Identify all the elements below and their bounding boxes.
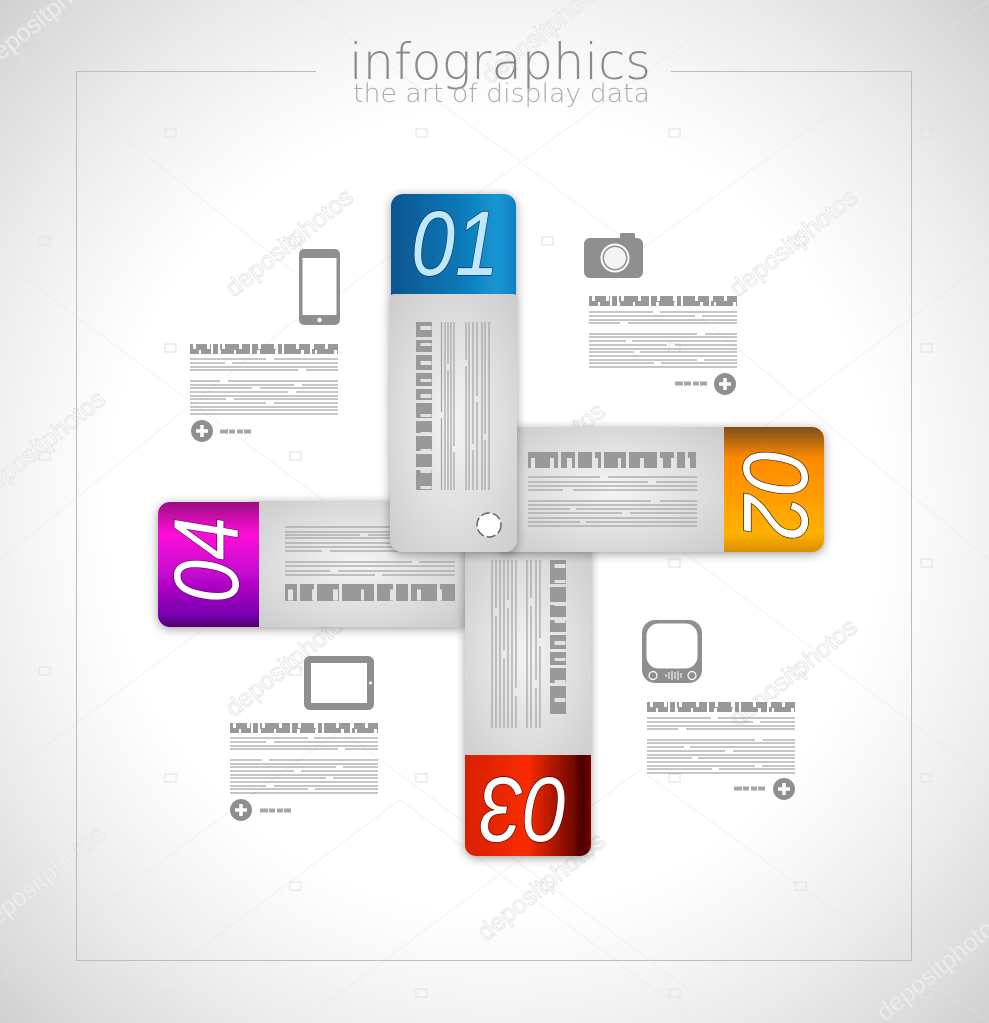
card 03 body [465,545,591,765]
panel: card 02 [500,427,826,552]
card 03 colour tab [465,755,591,856]
watermark pattern: depositphotos [472,827,611,947]
card 01 lines [442,322,489,490]
title: the art of display data [353,79,650,109]
title: infographics [349,33,651,91]
card 02 colour tab [724,427,824,552]
frame [76,72,912,960]
icon: camera [584,233,643,278]
panel: card 04 [156,501,466,627]
number 01: 01 [411,193,499,295]
card 01 body [390,294,517,552]
number 03: 03 [480,758,568,860]
number 02: 02 [724,449,826,539]
card 04 colour tab [158,502,259,627]
card 01 heading [424,322,426,490]
text block: top right [589,298,737,367]
watermark pattern: depositphotos [472,397,611,517]
card 03 lines [492,560,540,728]
panel: card 01 [390,193,517,552]
card 02 lines [528,477,697,526]
card 01 colour tab [391,194,516,300]
icon: retro tv [642,620,702,683]
add button: bottom right [734,778,795,800]
text block: top left [190,346,338,414]
panel: card 03 [465,545,591,860]
card 04 body [250,501,466,627]
card 03 heading [558,560,560,728]
add button: bottom left [230,799,291,821]
card 04 lines [285,527,455,575]
watermark pattern: depositphotos [724,183,863,303]
card 04 heading [285,592,455,595]
card 02 heading [528,460,697,463]
watermark pattern: depositphotos [220,183,359,303]
card 02 body [500,427,726,552]
number 04: 04 [156,517,258,603]
icon: smartphone [299,249,340,325]
text block: bottom right [647,704,795,773]
text block: bottom left [230,726,378,793]
add button: top right [675,373,736,395]
icon: tablet [304,656,374,710]
add button: top left [191,420,251,442]
card 01 ring [477,513,501,537]
watermark pattern: depositphotos [724,613,863,733]
watermark pattern: depositphotos [220,603,359,723]
